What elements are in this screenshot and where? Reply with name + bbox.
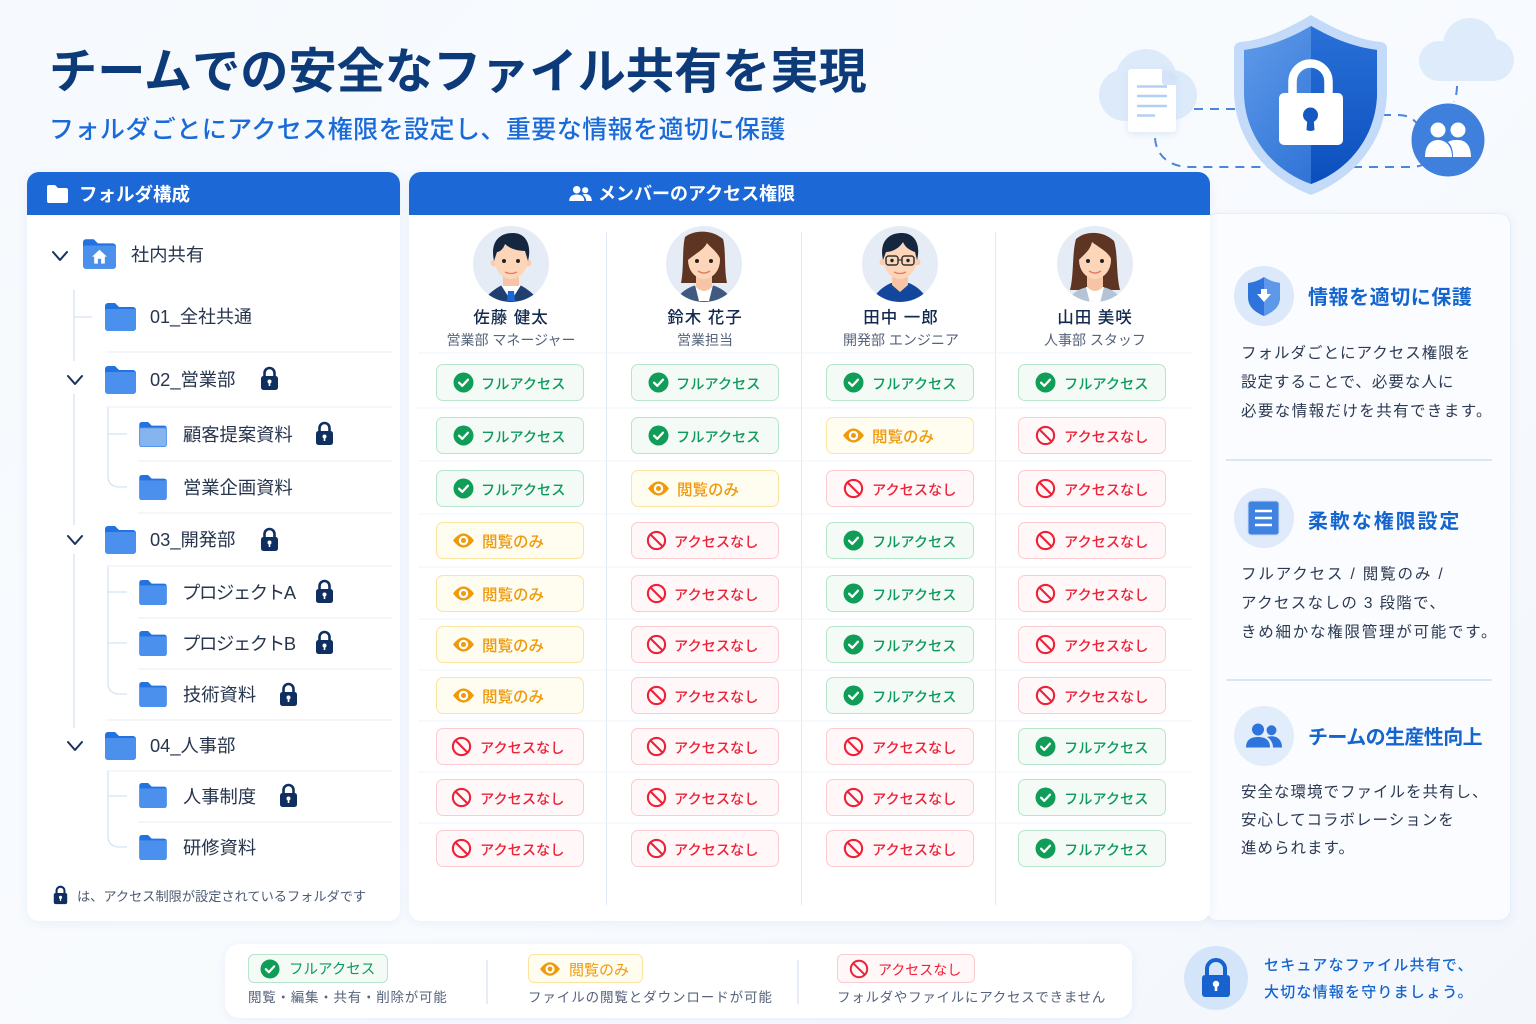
badge: column 4 row 3: アクセスなし (1064, 483, 1148, 499)
badge: column 4 row 5: アクセスなし (1064, 588, 1148, 604)
icon: folder 01 (105, 303, 136, 331)
badge: column 2 row 9: アクセスなし (674, 792, 758, 808)
icon: lock project B (316, 630, 333, 654)
badge: column 1 row 5: 閲覧のみ (482, 587, 544, 604)
badge: column 4 row 9: フルアクセス (1064, 792, 1148, 808)
body: productivity: 進められます。 (1241, 840, 1355, 857)
legend badge: none (837, 954, 975, 983)
badge: column 2 row 5 (631, 575, 779, 612)
avatar: 佐藤 健太 (473, 226, 549, 302)
icon: folder 04 (105, 732, 136, 760)
badge: column 2 row 5: アクセスなし (674, 588, 758, 604)
divider 1 (1226, 459, 1492, 461)
body: protect: 設定することで、必要な人に (1241, 374, 1454, 391)
badge: column 2 row 4: アクセスなし (674, 535, 758, 551)
badge: column 3 row 1: フルアクセス (872, 377, 956, 393)
badge: column 4 row 5 (1018, 575, 1166, 612)
name: 田中 一郎: 田中 一郎 (863, 309, 939, 327)
legend separator 2 (797, 960, 799, 1004)
badge: column 3 row 3: アクセスなし (872, 483, 956, 499)
icon: root folder (83, 239, 116, 269)
panel: member access (409, 172, 1210, 921)
badge: column 1 row 9: アクセスなし (480, 792, 564, 808)
badge: column 2 row 7: アクセスなし (674, 690, 758, 706)
badge: column 1 row 7 (436, 677, 584, 714)
illustration: shield, document, clouds and team (1099, 15, 1514, 195)
badge: column 3 row 6 (826, 626, 974, 663)
badge: column 2 row 6 (631, 626, 779, 663)
badge: column 3 row 4 (826, 522, 974, 559)
icon: folder project B (139, 631, 167, 656)
badge: column 2 row 7 (631, 677, 779, 714)
connector lines (1155, 86, 1457, 167)
name: 鈴木 花子: 鈴木 花子 (667, 309, 743, 327)
icon: lock HR system (280, 784, 297, 807)
label: tech: 技術資料 (183, 684, 256, 705)
shield (1234, 15, 1387, 195)
badge: column 1 row 4 (436, 522, 584, 559)
badge: column 3 row 2 (826, 417, 974, 454)
body: protect: フォルダごとにアクセス権限を (1241, 345, 1471, 362)
badge: column 4 row 1 (1018, 364, 1166, 401)
badge: column 3 row 1 (826, 364, 974, 401)
divider 2 (1226, 679, 1492, 681)
icon: lock tech (280, 682, 297, 706)
icon: folder tech (139, 682, 167, 707)
badge: column 3 row 9 (826, 779, 974, 816)
folder panel header: フォルダ構成 (79, 184, 190, 205)
avatar: 山田 美咲 (1057, 226, 1133, 302)
subtitle: フォルダごとにアクセス権限を設定し、重要な情報を適切に保護 (49, 116, 786, 144)
icon: shield small (1234, 266, 1294, 326)
badge: column 1 row 10 (436, 830, 584, 867)
badge: column 2 row 6: アクセスなし (674, 639, 758, 655)
legend badge: view (528, 954, 643, 983)
badge: column 1 row 10: アクセスなし (480, 843, 564, 859)
icon: folder 02 (105, 366, 136, 394)
badge: column 3 row 9: アクセスなし (872, 792, 956, 808)
label: planning: 営業企画資料 (183, 477, 293, 498)
icon: team (1412, 104, 1484, 176)
label: 04: 04_人事部 (150, 735, 235, 756)
badge: column 2 row 2 (631, 417, 779, 454)
badge: column 4 row 4 (1018, 522, 1166, 559)
badge: column 4 row 6 (1018, 626, 1166, 663)
label: HR system: 人事制度 (183, 786, 256, 807)
body: protect (1241, 344, 1493, 420)
badge: column 4 row 6: アクセスなし (1064, 639, 1148, 655)
badge: column 1 row 9 (436, 779, 584, 816)
badge: column 3 row 10: アクセスなし (872, 843, 956, 859)
icon: folder project A (139, 580, 167, 605)
body: productivity: 安全な環境でファイルを共有し、 (1241, 784, 1489, 801)
legend badge: full: フルアクセス (289, 962, 375, 978)
badge: column 3 row 6: フルアクセス (872, 639, 956, 655)
icon: folder HR system (139, 783, 167, 808)
badge: column 3 row 4: フルアクセス (872, 535, 956, 551)
icon: folder 03 (105, 526, 136, 554)
heading: protect: 情報を適切に保護 (1308, 287, 1472, 309)
icon: folder planning (139, 475, 167, 500)
badge: column 1 row 3 (436, 470, 584, 507)
badge: column 2 row 8 (631, 728, 779, 765)
legend separator 1 (486, 960, 488, 1004)
role: 佐藤: 営業部 マネージャー (447, 332, 575, 348)
icon: closing lock (1184, 946, 1248, 1010)
badge: column 1 row 2: フルアクセス (481, 430, 565, 446)
cloud: right (1419, 18, 1514, 81)
badge: column 3 row 8: アクセスなし (872, 741, 956, 757)
badge: column 3 row 5: フルアクセス (872, 588, 956, 604)
badge: column 4 row 4: アクセスなし (1064, 535, 1148, 551)
icon: list document (1234, 488, 1294, 548)
badge: column 4 row 10: フルアクセス (1064, 843, 1148, 859)
label: 01: 01_全社共通 (150, 307, 252, 327)
badge: column 4 row 7 (1018, 677, 1166, 714)
badge: column 1 row 6 (436, 626, 584, 663)
badge: column 3 row 2: 閲覧のみ (872, 429, 934, 446)
lock note text: は、アクセス制限が設定されているフォルダです (77, 889, 366, 904)
badge: column 2 row 2: フルアクセス (676, 430, 760, 446)
icon: folder proposal (139, 422, 167, 447)
label: training: 研修資料 (183, 837, 256, 858)
badge: column 1 row 1 (436, 364, 584, 401)
badge: column 4 row 8: フルアクセス (1064, 741, 1148, 757)
icon: lock note (54, 886, 68, 904)
avatar: 鈴木 花子 (666, 226, 742, 302)
body: protect: 必要な情報だけを共有できます。 (1241, 403, 1493, 420)
badge: column 3 row 7 (826, 677, 974, 714)
body: flexible: アクセスなしの 3 段階で、 (1241, 595, 1446, 612)
badge: column 1 row 8: アクセスなし (480, 741, 564, 757)
badge: column 2 row 8: アクセスなし (674, 741, 758, 757)
panel: legend (225, 944, 1132, 1018)
closing message (1264, 957, 1474, 1001)
badge: column 4 row 8 (1018, 728, 1166, 765)
badge: column 4 row 2 (1018, 417, 1166, 454)
label: project A: プロジェクトA (182, 582, 295, 603)
badge: column 2 row 10 (631, 830, 779, 867)
badge: column 4 row 1: フルアクセス (1064, 377, 1148, 393)
label: proposal: 顧客提案資料 (183, 424, 293, 445)
label: 02: 02_営業部 (150, 369, 235, 390)
body: productivity (1241, 784, 1489, 857)
badge: column 1 row 8 (436, 728, 584, 765)
badge: column 4 row 10 (1018, 830, 1166, 867)
document icon (1128, 69, 1176, 134)
panel: benefits (1205, 213, 1511, 921)
badge: column 1 row 5 (436, 575, 584, 612)
icon: lock project A (316, 580, 333, 603)
badge: column 2 row 9 (631, 779, 779, 816)
icon: lock proposal (316, 422, 333, 445)
label: 03: 03_開発部 (150, 529, 235, 550)
legend badge: view: 閲覧のみ (569, 962, 629, 979)
icon: team small (1234, 706, 1294, 766)
badge: column 2 row 10: アクセスなし (674, 843, 758, 859)
role: 田中: 開発部 エンジニア (843, 332, 959, 348)
badge: column 4 row 7: アクセスなし (1064, 690, 1148, 706)
grid lines (418, 232, 1192, 905)
badge: column 2 row 3 (631, 470, 779, 507)
badge: column 1 row 2 (436, 417, 584, 454)
role: 鈴木: 営業担当 (677, 332, 733, 348)
badge: column 2 row 1 (631, 364, 779, 401)
badge: column 4 row 2: アクセスなし (1064, 430, 1148, 446)
heading: productivity: チームの生産性向上 (1308, 727, 1482, 749)
legend badge: none: アクセスなし (878, 962, 961, 978)
role: 山田: 人事部 スタッフ (1044, 332, 1146, 348)
folder panel header (27, 172, 400, 215)
title: チームでの安全なファイル共有を実現 (49, 45, 867, 99)
badge: column 1 row 7: 閲覧のみ (482, 689, 544, 706)
icon: lock 03 (261, 528, 278, 551)
name: 山田 美咲: 山田 美咲 (1057, 309, 1133, 327)
legend text: none: フォルダやファイルにアクセスできません (837, 990, 1106, 1005)
badge: column 4 row 9 (1018, 779, 1166, 816)
badge: column 1 row 1: フルアクセス (481, 377, 565, 393)
cloud: left (1099, 49, 1197, 121)
badge: column 2 row 3: 閲覧のみ (677, 482, 739, 499)
badge: column 2 row 4 (631, 522, 779, 559)
name: 佐藤 健太: 佐藤 健太 (473, 309, 549, 327)
badge: column 3 row 5 (826, 575, 974, 612)
badge: column 1 row 4: 閲覧のみ (482, 534, 544, 551)
body: flexible (1241, 566, 1498, 641)
closing message: 大切な情報を守りましょう。 (1264, 984, 1474, 1001)
folder tree connector lines (52, 251, 392, 848)
legend text: view: ファイルの閲覧とダウンロードが可能 (528, 990, 773, 1005)
icon: lock 02 (261, 366, 278, 390)
body: productivity: 安心してコラボレーションを (1241, 812, 1455, 829)
icon: folder training (139, 835, 167, 860)
label: project B: プロジェクトB (182, 633, 295, 654)
body: flexible: フルアクセス / 閲覧のみ / (1241, 566, 1445, 583)
avatar: 田中 一郎 (862, 226, 938, 302)
badge: column 3 row 8 (826, 728, 974, 765)
heading: flexible: 柔軟な権限設定 (1308, 511, 1461, 533)
legend badge: full (248, 954, 388, 983)
badge: column 2 row 1: フルアクセス (676, 377, 760, 393)
access panel header: メンバーのアクセス権限 (598, 184, 795, 204)
badge: column 3 row 10 (826, 830, 974, 867)
access panel header (409, 172, 1210, 215)
badge: column 4 row 3 (1018, 470, 1166, 507)
badge: column 1 row 6: 閲覧のみ (482, 638, 544, 655)
closing message: セキュアなファイル共有で、 (1264, 957, 1474, 974)
badge: column 1 row 3: フルアクセス (481, 483, 565, 499)
legend text: full: 閲覧・編集・共有・削除が可能 (248, 990, 448, 1005)
badge: column 3 row 3 (826, 470, 974, 507)
badge: column 3 row 7: フルアクセス (872, 690, 956, 706)
panel: folder structure (27, 172, 400, 921)
body: flexible: きめ細かな権限管理が可能です。 (1241, 624, 1498, 641)
label: root folder: 社内共有 (131, 244, 204, 265)
